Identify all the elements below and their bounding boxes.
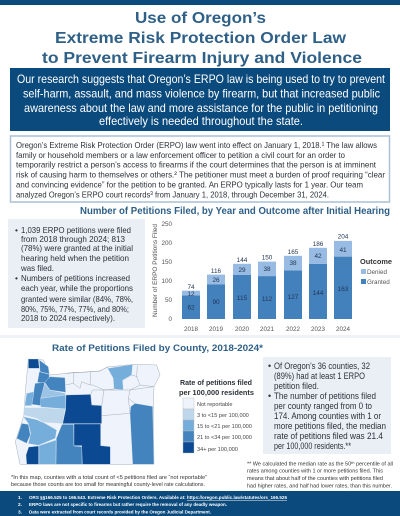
panel: county summary bullets: 174. Among counties with 1 or	[274, 411, 381, 421]
panel: petitions summary bullets: 80%, 75%, 77%, 77%, and 80%;	[21, 304, 129, 314]
references footer: ERPO laws are not specific to firearms but rather require the removal of any deadly weapon.	[29, 502, 227, 508]
bars 2023: 42	[314, 253, 322, 260]
map legend: 15 to <21 per 100,000	[197, 424, 252, 430]
median footnote: means that about half of the counties with petitions filed	[247, 476, 383, 482]
bars 2021: 150	[262, 254, 273, 262]
bars 2020: 115	[237, 295, 248, 302]
chart legend: Granted	[367, 279, 390, 286]
bars 2022	[284, 249, 302, 333]
panel: county summary bullets: rate of petitions filed was 21.4	[274, 431, 383, 441]
map footnote: *In this map, counties with a total count of <5 petitions filed are “not reportable”	[11, 475, 207, 481]
y axis labels: 50	[165, 297, 172, 304]
y axis title: Number of ERPO Petitions Filed	[152, 223, 159, 317]
panel: petitions summary bullets: hearing held when the petition	[21, 253, 129, 263]
title: Use of Oregon’s	[135, 10, 266, 27]
bars 2024: 204	[338, 234, 349, 240]
chart legend: Outcome	[360, 259, 392, 266]
choropleth map: Oregon counties	[15, 359, 160, 464]
references footer: 2.	[18, 502, 22, 508]
map heading: Rate of Petitions Filed by County, 2018-2024*	[52, 343, 263, 354]
bars 2024: 163	[338, 286, 349, 293]
map legend: Not reportable	[197, 402, 232, 408]
bar chart: petitions by year and outcome	[152, 221, 392, 333]
y axis labels: 100	[161, 278, 172, 285]
y axis labels: 0	[168, 316, 172, 323]
bars 2023: 186	[313, 241, 324, 248]
references footer	[0, 491, 400, 516]
key message panel: effectively is needed throughout the state.	[99, 114, 303, 128]
bars 2020: 144	[237, 257, 248, 264]
references footer: 1.	[18, 495, 22, 501]
intro text panel: analyzed Oregon’s ERPO court records³ from January 1, 2018, through December 31, 2024.	[16, 190, 329, 200]
panel: county summary bullets	[263, 357, 391, 454]
title: to Prevent Firearm Injury and Violence	[42, 50, 362, 67]
panel: petitions summary bullets	[8, 219, 145, 328]
bars 2018: 74	[187, 284, 195, 291]
panel: petitions summary bullets: each year, while the proportions	[21, 283, 133, 293]
map legend: per 100,000 residents	[179, 388, 254, 397]
bars 2020: 2020	[235, 326, 249, 333]
bars 2022: 127	[288, 294, 299, 301]
intro text panel: family or household members or a law enforcement officer to petition a civil court for an order to	[16, 150, 345, 160]
map footnote	[11, 475, 207, 488]
panel: petitions summary bullets: •	[15, 225, 18, 235]
bars 2022: 2022	[286, 326, 300, 333]
map legend	[179, 378, 254, 453]
bars 2024	[334, 234, 352, 333]
intro text panel: and convincing evidence” for the petition to be granted. An ERPO typically lasts for 1 year. Our team	[16, 180, 363, 190]
references footer: 3.	[18, 510, 22, 516]
panel: petitions summary bullets: from 2018 through 2024; 813	[21, 234, 125, 244]
panel: petitions summary bullets: •	[15, 273, 18, 283]
bars 2021	[258, 254, 276, 333]
bars 2021: 2021	[260, 326, 274, 333]
panel: county summary bullets: per 100,000 residents.**	[274, 441, 351, 451]
panel: county summary bullets: (89%) had at least 1 ERPO	[274, 371, 365, 381]
bars 2022: 38	[289, 260, 297, 267]
bars 2018: 2018	[184, 326, 198, 333]
panel: county summary bullets: •	[268, 391, 271, 401]
panel: county summary bullets: more petitions filed, the median	[274, 421, 386, 431]
title	[42, 10, 362, 67]
panel: county summary bullets: The number of petitions filed	[274, 391, 376, 401]
panel: petitions summary bullets: (78%) were granted at the initial	[21, 243, 133, 253]
intro text panel	[10, 136, 390, 202]
y axis labels	[161, 221, 172, 323]
chart legend: Denied	[367, 269, 387, 276]
panel: county summary bullets: petition filed.	[274, 381, 319, 391]
panel: petitions summary bullets: granted were similar (84%, 78%,	[21, 294, 133, 304]
median footnote	[247, 462, 393, 489]
median footnote: had higher rates, and half had lower rates, than this number.	[247, 483, 392, 489]
bars 2018: 12	[187, 291, 195, 298]
map footnote: because those counts are too small for meaningful county-level rate calculations.	[11, 482, 205, 488]
panel: petitions summary bullets: 1,039 ERPO petitions were filed	[21, 225, 131, 235]
panel: county summary bullets: Of Oregon’s 36 counties, 32	[274, 361, 370, 371]
y axis labels: 200	[161, 240, 172, 247]
bars 2019: 26	[212, 277, 220, 284]
map legend: 3 to <15 per 100,000	[197, 413, 249, 419]
panel: petitions summary bullets: 2018 to 2024 respectively).	[21, 313, 115, 323]
intro text panel: temporarily restrict a person’s access to firearms if the court determines that the person is at imminent	[16, 160, 377, 170]
bars 2024: 41	[339, 247, 347, 254]
bars 2023	[309, 241, 327, 333]
map legend: Rate of petitions filed	[180, 378, 252, 387]
panel: county summary bullets: per county ranged from 0 to	[274, 401, 372, 411]
bars 2018	[182, 284, 200, 333]
bars 2019: 116	[211, 268, 222, 275]
y axis labels: 250	[161, 221, 172, 228]
bars 2019: 90	[212, 299, 220, 306]
bars 2024: 2024	[336, 326, 350, 333]
y axis labels: 150	[161, 259, 172, 266]
divider band	[0, 335, 400, 338]
median footnote: rates among counties with 1 or more petitions filed. This	[247, 469, 383, 475]
key message panel	[10, 68, 390, 131]
bars 2019: 2019	[209, 326, 223, 333]
bars 2018: 62	[187, 304, 195, 312]
median footnote: ** We calculated the median rate as the 50ᵗʰ percentile of all	[247, 462, 393, 468]
bars 2020	[233, 257, 251, 333]
map legend: 21 to <34 per 100,000	[197, 435, 252, 441]
bars 2021: 38	[263, 266, 271, 273]
bars 2020: 29	[238, 267, 246, 274]
bars 2022: 165	[288, 249, 299, 256]
chart legend	[360, 259, 392, 286]
panel: petitions summary bullets: Numbers of petitions increased	[21, 273, 130, 283]
bars 2023: 2023	[311, 326, 325, 333]
bars 2023: 144	[313, 290, 324, 297]
panel: petitions summary bullets: was filed.	[20, 263, 54, 273]
references footer: Data were extracted from court records provided by the Oregon Judicial Department.	[29, 510, 211, 516]
references footer: ORS §§166.525 to 166.543. Extreme Risk Protection Orders. Available at: https://oregon.public.law/statutes/ors_166.525	[29, 495, 287, 501]
title: Extreme Risk Protection Order Law	[55, 30, 347, 47]
map legend: 34+ per 100,000	[197, 447, 238, 453]
bars 2019	[207, 268, 225, 333]
bars 2021: 112	[262, 296, 273, 303]
top banner bar	[0, 0, 400, 5]
panel: county summary bullets: •	[268, 361, 271, 371]
